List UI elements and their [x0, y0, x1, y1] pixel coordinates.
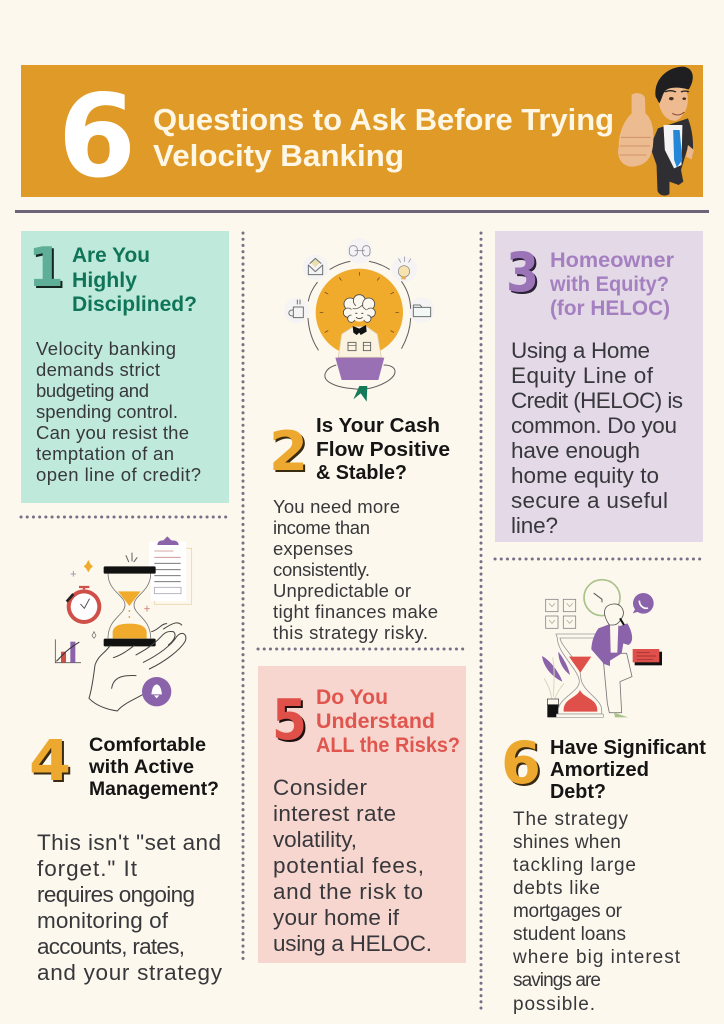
heading 5: Understand — [316, 710, 435, 733]
title text — [153, 102, 614, 173]
body text 3: have enough — [511, 438, 640, 463]
body text 6: debts like — [513, 878, 600, 899]
body text 5: potential fees, — [273, 853, 424, 878]
panel 2: cash flow — [269, 415, 450, 643]
title text: Velocity Banking — [153, 138, 404, 173]
heading 6 — [550, 737, 706, 803]
number 3: 3 — [508, 243, 541, 306]
body text 2: You need more — [273, 496, 400, 517]
icon: businessman thumbs up — [618, 67, 694, 196]
heading 5: Do You — [316, 686, 388, 709]
body text 2: this strategy risky. — [273, 622, 428, 643]
body text 5: your home if — [273, 905, 400, 930]
number 5: 5 — [274, 690, 309, 755]
body text 5: using a HELOC. — [273, 931, 432, 956]
number 3: 3 — [506, 241, 539, 304]
number 4: 4 — [29, 729, 71, 794]
body text 3: home equity to — [511, 463, 659, 488]
heading 3: (for HELOC) — [550, 297, 670, 320]
body text 3: Equity Line of — [511, 363, 654, 388]
illustration: hourglass on open hand — [55, 536, 192, 711]
body text 4: accounts, rates, — [37, 934, 185, 959]
body text 1: Can you resist the — [36, 422, 189, 443]
number 2: 2 — [271, 422, 310, 485]
panel 6: amortized debt — [501, 729, 706, 1015]
number 2: 2 — [269, 420, 308, 483]
body text 2: consistently. — [273, 559, 370, 580]
body text 3 — [511, 338, 683, 538]
heading 2: Is Your Cash — [316, 415, 440, 437]
heading 1: Disciplined? — [72, 293, 197, 316]
heading 3: Homeowner — [550, 249, 674, 272]
body text 2: expenses — [273, 538, 353, 559]
panel 5: risks — [258, 666, 466, 963]
heading 3: with Equity? — [549, 273, 669, 296]
body text 1: budgeting and — [36, 380, 149, 401]
body text 6 — [512, 809, 681, 1015]
title number 6: 6 — [58, 70, 136, 203]
number 5: 5 — [272, 688, 307, 753]
dotted separators — [21, 233, 703, 1012]
panel 4: active management — [29, 729, 223, 985]
body text 4: This isn't "set and — [37, 830, 221, 855]
body text 5 — [273, 775, 432, 956]
body text 3: secure a useful — [511, 488, 668, 513]
heading 4: Management? — [89, 779, 219, 800]
heading 1: Are You — [72, 244, 150, 267]
body text 6: tackling large — [513, 855, 636, 876]
body text 1 — [36, 338, 201, 485]
heading 6: Amortized — [550, 759, 649, 781]
body text 1: open line of credit? — [36, 464, 201, 485]
body text 4: forget." It — [37, 856, 138, 881]
title banner — [21, 65, 703, 203]
number 1: 1 — [28, 236, 64, 299]
number 6: 6 — [503, 731, 543, 799]
illustration: person with laptop and clock — [284, 238, 434, 402]
number 4: 4 — [31, 731, 73, 796]
heading 4 — [88, 735, 219, 800]
divider rule — [15, 210, 709, 213]
body text 6: shines when — [513, 832, 621, 853]
body text 5: interest rate — [273, 801, 396, 826]
title text: Questions to Ask Before Trying — [153, 102, 614, 137]
heading 5 — [316, 686, 460, 757]
body text 3: line? — [511, 513, 558, 538]
body text 2: Unpredictable or — [273, 580, 411, 601]
body text 2: tight finances make — [273, 601, 438, 622]
heading 2: Flow Positive — [316, 439, 450, 461]
body text 6: student loans — [513, 924, 626, 945]
body text 4 — [37, 830, 223, 985]
body text 6: where big interest — [512, 947, 681, 968]
body text 1: temptation of an — [36, 443, 174, 464]
panel 1: disciplined — [21, 231, 229, 503]
body text 4: monitoring of — [37, 908, 169, 933]
heading 6: Debt? — [550, 781, 606, 803]
heading 1: Highly — [72, 269, 137, 292]
body text 6: savings are — [513, 970, 601, 991]
body text 5: Consider — [273, 775, 368, 800]
body text 5: and the risk to — [273, 879, 423, 904]
heading 4: Comfortable — [89, 735, 206, 756]
body text 6: possible. — [513, 994, 595, 1015]
body text 3: Using a Home — [511, 338, 650, 363]
body text 2 — [273, 496, 438, 643]
body text 5: volatility, — [273, 827, 357, 852]
body text 2: income than — [273, 517, 370, 538]
body text 1: Velocity banking — [36, 338, 176, 359]
icon: folder — [413, 305, 431, 317]
number 1: 1 — [30, 238, 66, 301]
body text 6: The strategy — [513, 809, 628, 830]
heading 1 — [72, 244, 197, 316]
body text 4: requires ongoing — [37, 882, 195, 907]
heading 2 — [316, 415, 450, 484]
heading 5: ALL the Risks? — [316, 734, 460, 757]
body text 3: Credit (HELOC) is — [511, 388, 683, 413]
illustration: person on phone beside hourglass — [542, 580, 662, 717]
body text 3: common. Do you — [511, 413, 677, 438]
heading 6: Have Significant — [550, 737, 706, 759]
heading 3 — [549, 249, 674, 320]
body text 6: mortgages or — [513, 901, 623, 922]
body text 1: demands strict — [36, 359, 160, 380]
icon: mug — [289, 300, 303, 318]
body text 4: and your strategy — [37, 960, 223, 985]
icon: envelope — [308, 258, 323, 275]
body text 1: spending control. — [36, 401, 178, 422]
heading 4: with Active — [88, 757, 194, 778]
panel 3: home equity — [495, 231, 703, 542]
icon: dumbbell — [349, 246, 370, 256]
icon: light bulb — [398, 257, 411, 279]
heading 2: & Stable? — [316, 462, 407, 484]
number 6: 6 — [501, 729, 541, 797]
